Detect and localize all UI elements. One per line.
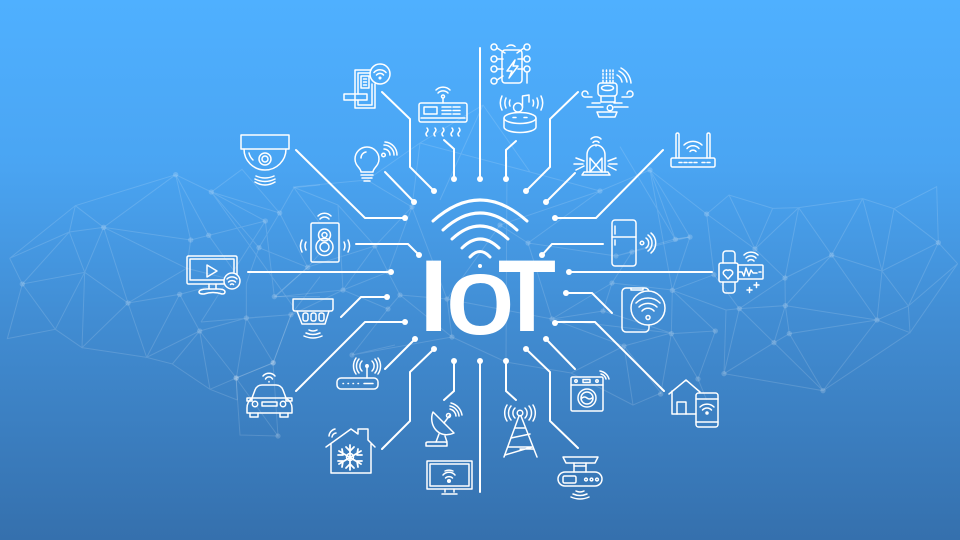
- title: IoT: o: [446, 236, 514, 356]
- network mesh: centre: [233, 105, 689, 439]
- icon: smoke detector: [293, 299, 333, 338]
- icon: phone circuit with lightning: [491, 44, 530, 84]
- icon: smart television: [187, 256, 240, 294]
- icon: phone with wifi badge: [622, 288, 665, 332]
- icon: smart speaker with music note: [500, 95, 543, 132]
- title: IoT: T: [498, 239, 556, 353]
- icon: monitor with wifi: [427, 461, 472, 494]
- icon: cell tower: [504, 405, 537, 457]
- central wifi symbol: [433, 200, 527, 268]
- title: IoT: [420, 236, 556, 356]
- device icons: [187, 44, 763, 499]
- icon: wireless speaker box: [301, 213, 349, 262]
- icon: smart watch: [719, 251, 763, 293]
- icon: smart light bulb: [355, 142, 397, 181]
- icon: smart door lock: [344, 64, 390, 108]
- icon: smart kitchen scale: [558, 457, 602, 499]
- icon: small wifi router: [337, 358, 381, 389]
- icon: connected car: [247, 373, 292, 417]
- icon: smart fan robot: [582, 68, 633, 117]
- circuit connector lines: [248, 48, 712, 492]
- icon: wifi router with antennas: [671, 133, 715, 167]
- network mesh: left: [7, 169, 320, 400]
- icon: satellite dish: [426, 403, 462, 446]
- icon: smart home thermostat snowflake: [326, 429, 375, 473]
- icon: air conditioner: [419, 87, 467, 136]
- network mesh: right: [620, 147, 958, 400]
- icon: washing machine: [571, 371, 609, 411]
- icon: alarm beacon: [574, 137, 617, 175]
- icon: smart home and phone: [669, 380, 718, 427]
- icon: dome security camera: [241, 135, 289, 185]
- icon: smart fridge: [612, 220, 656, 266]
- title: IoT: I: [420, 239, 448, 353]
